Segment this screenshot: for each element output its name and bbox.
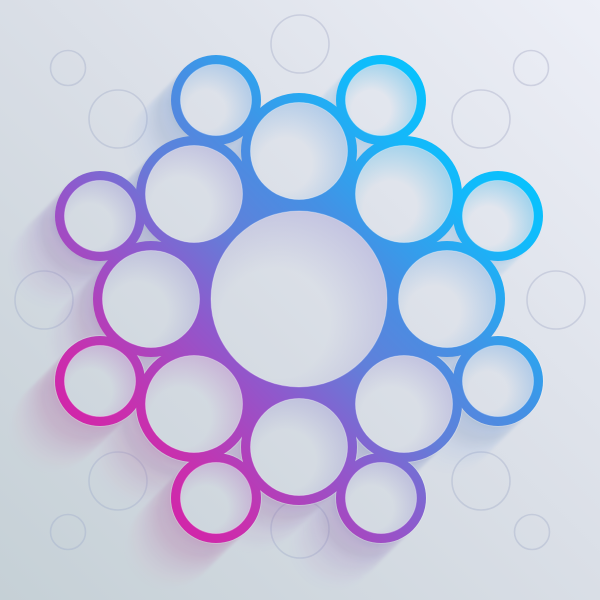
outer rim highlight	[54, 336, 544, 544]
holes base	[64, 64, 534, 534]
holes inner shading	[64, 64, 534, 534]
long shadow	[8, 57, 541, 590]
circle cluster body	[55, 55, 543, 543]
